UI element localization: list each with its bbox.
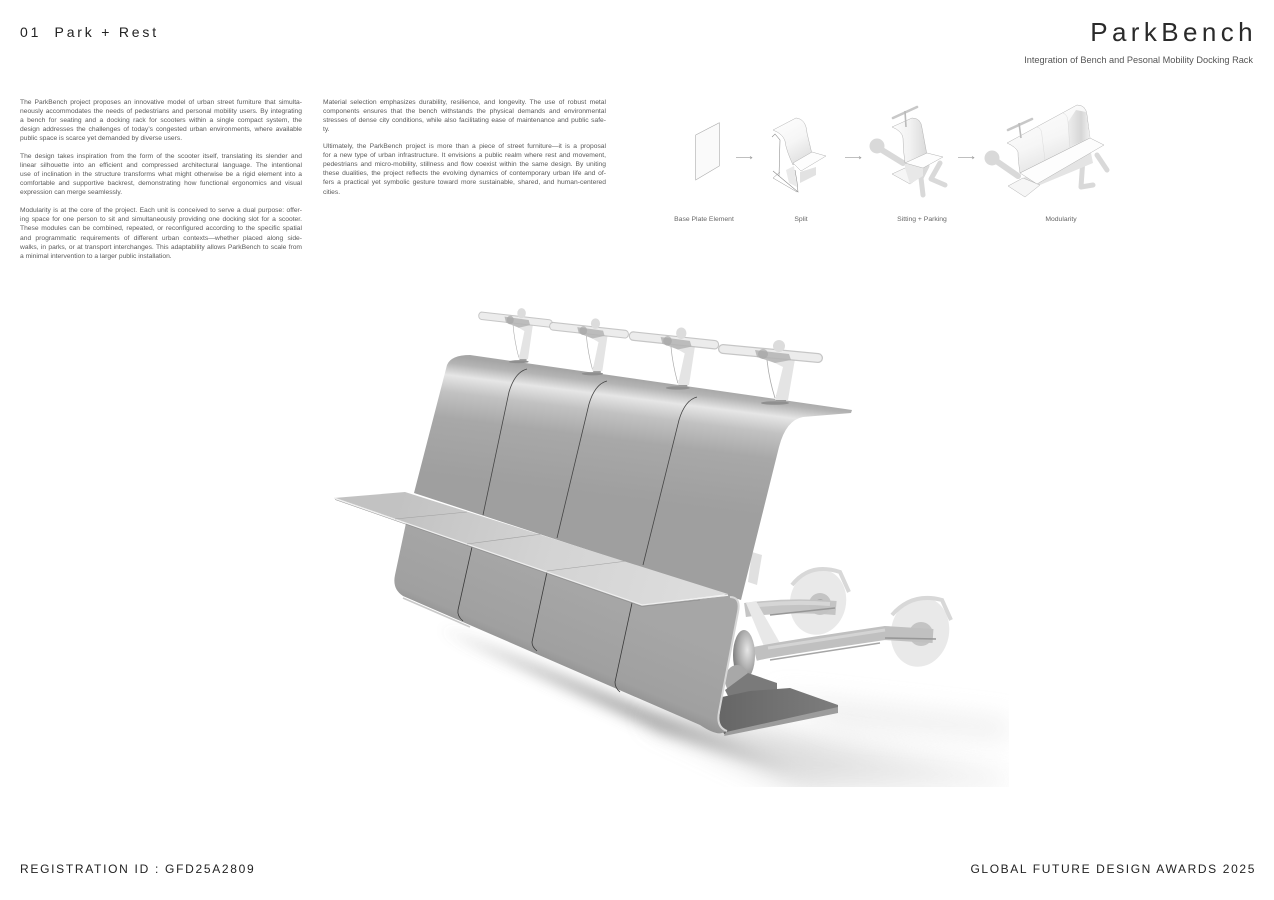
text block: middle column: Ultimately, the ParkBench project is more than a piece of street furniture—it is a proposal (323, 142, 606, 150)
tube 1 (745, 606, 836, 610)
text block: left column: comfortable and supportive backrest, demonstrating how functional ergonomics and visual (20, 180, 302, 187)
text block: left column: a minimal intervention to a larger public installation. (20, 252, 172, 260)
ground shadow (462, 635, 996, 787)
footer: award name: GLOBAL FUTURE DESIGN AWARDS 2025 (970, 862, 1256, 876)
label: base plate element: Base Plate Element (674, 216, 734, 223)
label: sitting + parking: Sitting + Parking (897, 216, 947, 223)
lower front panel (394, 523, 739, 733)
text block: left column: These modules can be combined, repeated, or reconfigured according to the specific spatial (20, 225, 302, 232)
tube 2 (755, 633, 933, 654)
diagram: concept sequence (695, 104, 1110, 198)
text block: middle column (323, 98, 606, 196)
text block: middle column: these dualities, the project reflects the evolving dynamics of contemporary urban life and of- (323, 170, 606, 177)
handlebar 4 (723, 340, 818, 405)
text block: left column: The ParkBench project proposes an innovative model of urban street furniture that simulta- (20, 98, 302, 106)
upper bracket (748, 552, 762, 585)
foot plate (718, 673, 838, 736)
text block: left column: neously accommodates the needs of pedestrians and personal mobility users. By integrating (20, 108, 302, 115)
title: ParkBench: ParkBench (1090, 17, 1257, 47)
arrow 1 (736, 156, 752, 159)
arrow 2 (845, 156, 861, 159)
subtitle: Integration of Bench and Pesonal Mobility Docking Rack (1024, 55, 1253, 65)
handlebar 1 (482, 308, 549, 363)
text block: left column: and programmatic requirements of different urban contexts—whether placed along side- (20, 234, 302, 242)
text block: left column: Modularity is at the core of the project. Each unit is conceived to serve a dual purpose: offer- (20, 207, 302, 214)
icon: base plate element (696, 123, 719, 180)
text block: left column: public space is scarce yet demanded by diverse users. (20, 135, 182, 142)
text block: left column: ing space for one person to sit and simultaneously providing one docking slot for a scooter. (20, 216, 302, 223)
footer: registration id: REGISTRATION ID : GFD25A2809 (20, 862, 255, 876)
arrow 3 (958, 156, 974, 159)
icon: modularity (984, 105, 1107, 197)
handlebars (482, 308, 818, 405)
icon: split module (772, 118, 826, 192)
text block: left column: use of inclination in the structure transforms what might otherwise be a rigid element into a (20, 170, 302, 178)
text block: middle column: stresses of dense city conditions, while also facilitating ease of maintenance and public safe- (323, 117, 606, 124)
text block: left column: walks, in parks, or at transport interchanges. This adaptability allows ParkBench to scale from (20, 244, 302, 250)
text block: left column: The design takes inspiration from the form of the scooter itself, translating its slender and (20, 152, 302, 160)
seams (483, 369, 697, 565)
lower seams (458, 547, 632, 692)
handlebar 3 (633, 327, 715, 390)
rear wheel 1 (784, 564, 852, 640)
text block: middle column: ty. (323, 126, 330, 133)
text block: middle column: pedestrians and micro-mobility, stillness and flow coexist within the same design. By uniting (323, 161, 606, 168)
ball joint (733, 630, 755, 680)
text block: middle column: components ensures that the bench withstands the physical demands and environmental (323, 108, 606, 115)
rim highlight (718, 597, 739, 731)
text block: left column: linear silhouette into an efficient and compressed architectural language. The intentional (20, 162, 302, 168)
text block: middle column: for a new type of urban infrastructure. It envisions a public realm where rest and movement, (323, 152, 606, 158)
seat surface (334, 492, 728, 606)
text block: middle column: Material selection emphasizes durability, resilience, and longevity. The use of robust metal (323, 98, 606, 106)
text block: left column: expression can merge seamlessly. (20, 189, 122, 196)
label: modularity: Modularity (1045, 216, 1077, 223)
text block: middle column: cities. (323, 189, 340, 196)
strut (746, 601, 784, 656)
upper back panel (414, 355, 852, 600)
scooter: deck and wheels behind bench (725, 552, 956, 695)
illustration: bench render (334, 308, 996, 787)
handlebar 2 (553, 318, 625, 375)
icon: sitting and parking (870, 107, 945, 195)
text block: middle column: fers a practical yet symbolic gesture toward more sustainable, shared, and human-centered (323, 179, 606, 186)
text block: left column (20, 98, 302, 260)
text block: left column: design addresses the challenges of today’s congested urban environments, where available (20, 126, 302, 133)
rear wheel 2 (884, 592, 956, 672)
text block: left column: a bench for seating and a docking rack for scooters within a single compact system, the (20, 117, 302, 124)
heading: section title: 01 Park + Rest (20, 24, 159, 40)
label: split: Split (794, 216, 808, 223)
